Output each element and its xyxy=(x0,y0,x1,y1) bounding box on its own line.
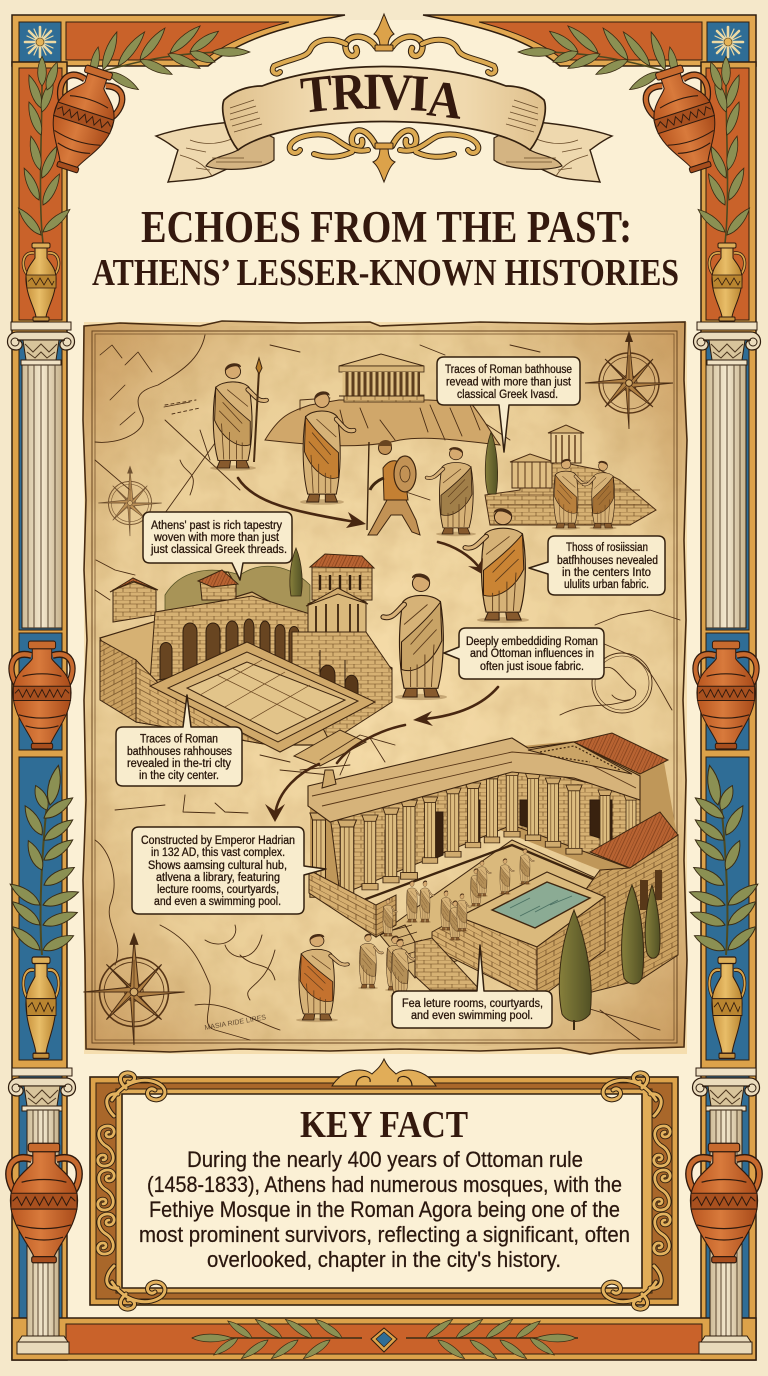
cypress tree 2 xyxy=(622,885,644,984)
callout: traces of Roman bathhouses (mid left): Traces of Roman xyxy=(140,734,218,746)
amphora middle left xyxy=(11,641,73,749)
figure: man with staff xyxy=(210,363,266,471)
arrow: path 3 xyxy=(413,687,498,726)
map paving sketch lines xyxy=(260,735,395,775)
tilted amphora top right xyxy=(638,59,731,179)
bath complex illustration xyxy=(100,548,392,766)
tilted amphora top left xyxy=(37,59,130,179)
map tiny labels: MASIA RIDE LIRES xyxy=(204,1014,267,1032)
callout: traces of Roman bathhouses (mid left): bathhouses rahhouses xyxy=(127,746,232,758)
callout: constructed by Hadrian xyxy=(132,827,326,914)
upper right ionic column xyxy=(693,322,761,628)
frame: top right corner spandrel xyxy=(423,15,756,66)
key fact heading: KEY FACT xyxy=(300,1104,468,1146)
callout: traces of Roman bathhouses (mid left): revealed in the-tri clty xyxy=(127,758,231,770)
olive sprig lower right xyxy=(688,764,761,955)
callout: lecture rooms: Fea leture rooms, courtyards, xyxy=(402,998,543,1010)
callout: traces of Roman bathhouse (top): revead with more than just xyxy=(446,376,572,388)
gold jar lower right xyxy=(709,957,745,1058)
figure: woman with green-grey robe xyxy=(427,447,476,536)
icon: blue rosette tile left xyxy=(19,22,61,62)
figure: man in orange toga bottom xyxy=(296,934,347,1022)
callout: constructed by Hadrian: Shows aamsing cultural hub, xyxy=(148,860,287,872)
olive sprig lower left xyxy=(7,764,80,955)
callout: Thoss of rosiissian: batfhhouses nevealed xyxy=(557,555,658,567)
right laurel branch, vertical xyxy=(695,56,753,243)
right border column frame xyxy=(701,62,756,1360)
arrow: path 4 xyxy=(337,725,405,763)
key fact body text: overlooked, chapter in the city's history. xyxy=(207,1247,561,1272)
key fact body text: most prominent survivors, reflecting a significant, often xyxy=(139,1222,630,1247)
callout: lecture rooms: and even swimming pool. xyxy=(411,1010,533,1022)
left laurel branch, horizontal xyxy=(88,23,250,93)
upper left ionic column xyxy=(7,322,75,628)
key fact body text: During the nearly 400 years of Ottoman rule xyxy=(187,1147,583,1172)
map coastlines and roads xyxy=(95,335,680,1040)
callout: Athens' past: woven with more than just xyxy=(153,532,280,544)
sepia tone over map illustration xyxy=(84,322,687,1054)
top flourish ornament xyxy=(273,14,495,74)
amphora middle right xyxy=(695,641,757,749)
callout: constructed by Hadrian: Constructed by Emperor Hadrian xyxy=(141,835,295,847)
gold jar upper right xyxy=(709,243,745,321)
callout: deeply embedding: and Ottoman influences in xyxy=(470,648,594,660)
callout: traces of Roman bathhouse (top): classical Greek Ivasd. xyxy=(457,389,558,401)
figures: pair by town xyxy=(552,459,617,530)
gold jar upper left xyxy=(23,243,59,321)
left border column frame xyxy=(12,62,67,1360)
callout: lecture rooms xyxy=(392,945,552,1028)
panel: key fact ornate frame xyxy=(90,1059,678,1309)
figure: speaking man in orange xyxy=(465,508,529,623)
key fact body text: (1458-1833), Athens had numerous mosques, with the xyxy=(147,1172,622,1197)
callout: Thoss of rosiissian xyxy=(529,536,665,595)
staff xyxy=(254,358,262,462)
bottom band with laurel xyxy=(12,1317,756,1361)
arrow: path 2 xyxy=(438,542,483,574)
callout: deeply embedding xyxy=(444,628,604,679)
arrow: path 5 xyxy=(265,764,319,822)
figure: woman in ochre robe xyxy=(300,391,354,505)
callout: deeply embedding: Deeply embeddiding Roman xyxy=(466,636,598,648)
callout: deeply embedding: often just isoue fabric. xyxy=(480,661,584,673)
frame: top left corner spandrel xyxy=(12,15,345,66)
callout: constructed by Hadrian: in 132 AD, this vast complex. xyxy=(151,847,285,859)
figure: large man centre xyxy=(383,574,447,700)
callout: Athens' past: just classical Greek threads. xyxy=(150,544,287,556)
callout: constructed by Hadrian: lecture rooms, courtyards, xyxy=(157,884,279,896)
icon: blue rosette tile right xyxy=(707,22,749,62)
gold jar lower left xyxy=(23,957,59,1058)
callout: Thoss of rosiissian: ululits urban fabric. xyxy=(564,579,649,591)
right laurel branch, horizontal xyxy=(518,23,680,93)
callout: constructed by Hadrian: atlvena a library, featuring xyxy=(156,872,280,884)
small map region circle right xyxy=(592,653,652,713)
cypress tree 3 xyxy=(645,885,660,958)
lower right ionic column xyxy=(692,1068,760,1354)
big amphora lower left xyxy=(9,1143,79,1263)
callout: Thoss of rosiissian: in the centers Into xyxy=(562,567,651,579)
key fact body text xyxy=(139,1147,630,1272)
left laurel branch, vertical xyxy=(15,56,73,243)
callout: traces of Roman bathhouse (top) xyxy=(437,357,580,452)
bottom flourish ornament xyxy=(290,130,478,182)
callout: constructed by Hadrian: and even a swimming pool. xyxy=(154,896,281,908)
callout: traces of Roman bathhouses (mid left) xyxy=(116,695,242,786)
stoa complex illustration xyxy=(308,733,678,1000)
panel: parchment map xyxy=(83,321,687,1054)
lower left ionic column xyxy=(8,1068,76,1354)
icon: compass rose top right xyxy=(585,331,673,429)
heading line 1: ECHOES FROM THE PAST: xyxy=(141,202,632,252)
courtyard figures xyxy=(358,848,534,997)
key fact body text: Fethiye Mosque in the Roman Agora being one of the xyxy=(149,1197,620,1222)
cypress near town xyxy=(485,432,498,494)
callout: Athens' past xyxy=(143,512,292,580)
cypress tree 1 xyxy=(559,910,591,1030)
icon: compass rose left xyxy=(98,466,162,536)
banner ribbon xyxy=(156,66,612,182)
callout: traces of Roman bathhouses (mid left): in the city center. xyxy=(139,770,219,782)
acropolis hill and parthenon xyxy=(265,354,500,446)
callout: traces of Roman bathhouse (top): Traces of Roman bathhouse xyxy=(445,364,572,376)
town with temple, right xyxy=(485,425,656,525)
callout: Athens' past: Athens' past is rich tapestry xyxy=(151,520,282,532)
cream inner field xyxy=(66,20,702,1320)
callout: Thoss of rosiissian: Thoss of rosiissian xyxy=(566,542,648,554)
title: TRIVIA: TRIVIA xyxy=(298,61,465,130)
icon: compass rose bottom left xyxy=(83,932,185,1045)
big amphora lower right xyxy=(689,1143,759,1263)
figure: soldier with shield and spear xyxy=(367,440,420,535)
arrow: path 1 xyxy=(238,478,366,528)
